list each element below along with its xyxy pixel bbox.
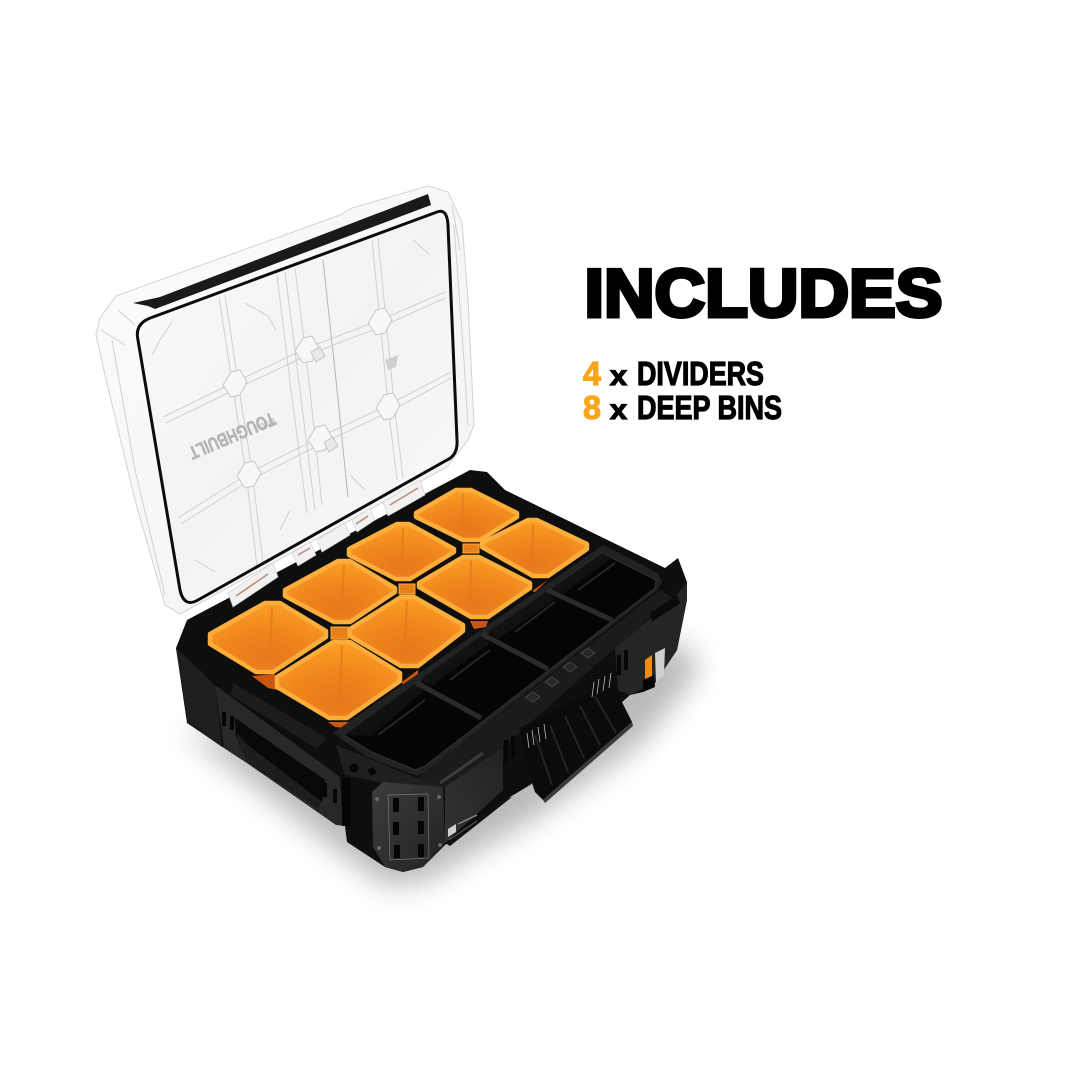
right top surface [417,590,672,787]
lid logo: TOUGHBUILT: STACK [255,416,276,430]
bin 8 [482,520,587,576]
side latch: orange and silver [643,648,665,692]
orange bins [210,490,587,728]
bin 6 [419,557,530,617]
top surface tabs [526,648,595,702]
list item: dividers: 4 [583,355,602,392]
list item: deep bins: DEEP BINS [637,389,782,426]
product: toolbox organizer [96,186,700,886]
tray upper walls [344,553,612,736]
drop shadow [182,640,700,886]
lid node blocks [311,347,338,452]
corner plate with slots [372,782,445,872]
lid inner ribs [101,205,468,595]
lid logo: TOUGHBUILT: TOUGHBUILT [185,407,278,463]
bin 7 [416,490,517,540]
lid gasket [137,211,457,602]
lid corner mark [385,355,398,370]
tray floor ribs [378,563,615,735]
carry handle [237,733,322,809]
list item: dividers: x [610,360,627,391]
list: includes [583,355,782,426]
left corner face [176,648,222,747]
clip slits [504,650,628,762]
lid hinge bar [133,194,431,309]
black tray compartments [333,545,662,776]
lid logo: TOUGHBUILT [185,407,278,463]
bin wall creases [270,494,533,695]
bin 4 [350,597,463,666]
bin connector squares [331,544,479,639]
top lip above handle [231,683,327,749]
heading: INCLUDES [584,256,942,332]
right face [445,747,503,843]
list item: deep bins [583,389,782,426]
bin 1 [210,603,326,672]
rating badge [448,815,477,840]
tray dividers [417,590,612,718]
handle recess [235,718,325,802]
right end face [615,582,687,695]
list item: dividers: DIVIDERS [637,355,764,392]
bin 3 [285,561,395,622]
lid hinge tabs [228,480,425,607]
list item: deep bins: x [610,394,627,425]
handle clip slots [222,712,337,803]
hinge highlights [236,488,418,596]
list item: dividers [583,355,764,392]
bin side shadow patches [252,580,548,728]
lid diamond nodes [223,308,400,488]
bin 5 [349,524,454,579]
left face [215,685,343,825]
bin 2 [277,642,400,718]
transparent lid [96,186,474,614]
corner rim surface [336,745,445,787]
front latch flap [520,673,633,803]
toolbox body [176,470,687,872]
list item: deep bins: 8 [583,389,601,426]
